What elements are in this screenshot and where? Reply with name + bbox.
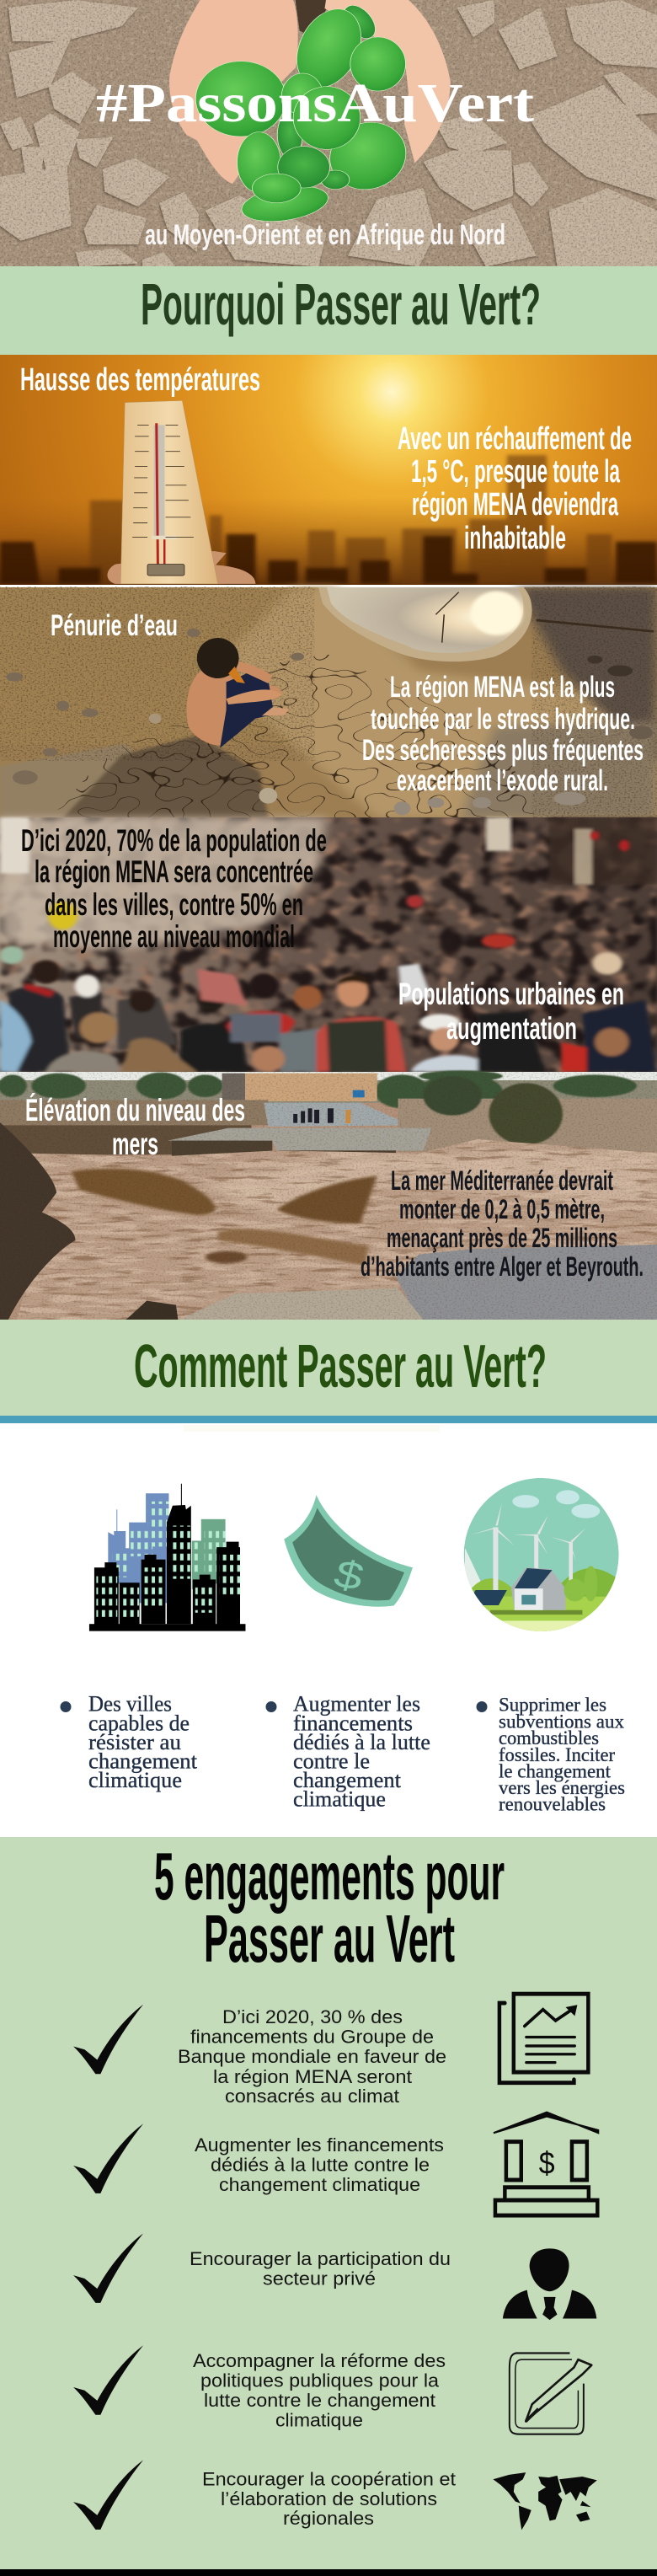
icon: city xyxy=(89,1484,245,1631)
heading xyxy=(154,1839,505,1976)
commitment 4: politiques publiques pour la xyxy=(200,2370,440,2391)
body text: inhabitable xyxy=(464,521,566,556)
statistic text: moyenne au niveau mondial xyxy=(53,919,295,954)
bullet list: financing: contre le xyxy=(293,1749,370,1774)
thermometer xyxy=(107,400,255,584)
bullet list: subsidies: vers les énergies xyxy=(499,1777,625,1798)
hero photo: hands holding a seedling over cracked soil xyxy=(0,0,657,266)
icon: renewable energy scene xyxy=(461,1478,624,1632)
bullet list: cities xyxy=(61,1692,198,1792)
commitment 2: dédiés à la lutte contre le xyxy=(211,2155,430,2176)
body text xyxy=(362,671,644,797)
heading text xyxy=(25,1093,245,1161)
commitment 2: Augmenter les financements xyxy=(195,2134,444,2156)
checkmarks xyxy=(73,2005,143,2530)
commitment 2 xyxy=(195,2134,444,2195)
bullet list: financing: changement xyxy=(293,1768,402,1792)
commitment 1: D’ici 2020, 30 % des xyxy=(222,2006,403,2027)
commitment 1: Banque mondiale en faveur de xyxy=(178,2046,446,2067)
bullet list: financing: Augmenter les xyxy=(293,1692,420,1716)
panel: water shortage xyxy=(0,585,657,818)
icon: world map xyxy=(493,2472,597,2530)
heading: Passer au Vert xyxy=(204,1901,455,1976)
commitment 3: Encourager la participation du xyxy=(190,2248,451,2269)
bullet list: subsidies: combustibles xyxy=(499,1727,599,1749)
bullet list: cities: changement xyxy=(88,1749,198,1774)
bullet list: subsidies: renouvelables xyxy=(499,1793,606,1814)
icon: bank xyxy=(494,2113,598,2215)
bullet list: subsidies: le changement xyxy=(499,1760,612,1781)
commitment 3: secteur privé xyxy=(263,2268,376,2289)
commitment 3 xyxy=(190,2248,451,2289)
commitment 4: lutte contre le changement xyxy=(204,2390,435,2411)
commitment 5: régionales xyxy=(283,2508,374,2529)
bullet list: financing: climatique xyxy=(293,1786,386,1811)
heading text: mers xyxy=(112,1127,158,1161)
section heading band: Pourquoi xyxy=(0,266,657,355)
bullet list: cities: Des villes xyxy=(88,1692,172,1716)
commitment 4: climatique xyxy=(275,2410,363,2431)
bullet list: subsidies: subventions aux xyxy=(499,1711,624,1732)
footer bar xyxy=(0,2569,657,2576)
section heading band: Comment xyxy=(0,1320,657,1423)
icon: report xyxy=(499,1994,588,2083)
bullet list: financing xyxy=(266,1692,430,1811)
icon: bank: $ xyxy=(539,2145,555,2181)
heading text: Pénurie d’eau xyxy=(51,609,178,642)
icon: banknote xyxy=(284,1495,413,1607)
commitment 1: financements du Groupe de xyxy=(190,2027,434,2048)
bullet list: subsidies: fossiles. Inciter xyxy=(499,1744,615,1765)
bullet list: cities: résister au xyxy=(88,1730,181,1754)
panel: urban population growth xyxy=(0,817,657,1072)
statistic text: dans les villes, contre 50% en xyxy=(45,887,303,922)
commitment 4 xyxy=(193,2350,446,2431)
heading text: augmentation xyxy=(446,1011,577,1046)
statistic text: D’ici 2020, 70% de la population de xyxy=(21,823,327,858)
commitment 5 xyxy=(202,2468,456,2529)
commitment 5: Encourager la coopération et xyxy=(202,2468,456,2489)
heading text: Élévation du niveau des xyxy=(25,1093,245,1127)
commitment 1: la région MENA seront xyxy=(213,2066,412,2087)
pebbles xyxy=(6,629,653,815)
commitment 1: consacrés au climat xyxy=(225,2086,399,2107)
body text xyxy=(398,421,632,556)
commitment 5: l’élaboration de solutions xyxy=(221,2488,437,2509)
icon: pen on note xyxy=(510,2354,591,2434)
bullet list: financing: dédiés à la lutte xyxy=(293,1730,430,1754)
bullet list: subsidies: Supprimer les xyxy=(499,1694,606,1716)
commitment 1 xyxy=(178,2006,446,2107)
bullet list: cities: climatique xyxy=(88,1768,182,1792)
icon: businessperson xyxy=(503,2248,596,2320)
commitment 4: Accompagner la réforme des xyxy=(193,2350,446,2371)
panel: sea level rise xyxy=(0,1070,657,1322)
bullet list: financing: financements xyxy=(293,1711,413,1736)
city skyline xyxy=(0,400,657,585)
statistic text: la région MENA sera concentrée xyxy=(35,854,313,889)
panel: rising temperatures xyxy=(0,355,657,585)
panel: how to go green xyxy=(61,1425,625,1812)
heading text xyxy=(398,977,624,1046)
statistic text xyxy=(21,823,327,954)
bullet list: subsidies xyxy=(477,1694,625,1814)
body text xyxy=(361,1165,644,1282)
boy xyxy=(187,638,289,748)
icon: banknote: $ xyxy=(329,1552,368,1599)
bullet list: cities: capables de xyxy=(88,1711,190,1736)
subtitle: au Moyen-Orient et en Afrique du Nord xyxy=(145,219,505,251)
commitment 2: changement climatique xyxy=(219,2174,420,2195)
panel: 5 commitments xyxy=(0,1837,657,2569)
heading text: Hausse des températures xyxy=(20,362,260,398)
title: #PassonsAuVert: #PassonsAuVert xyxy=(96,72,534,134)
